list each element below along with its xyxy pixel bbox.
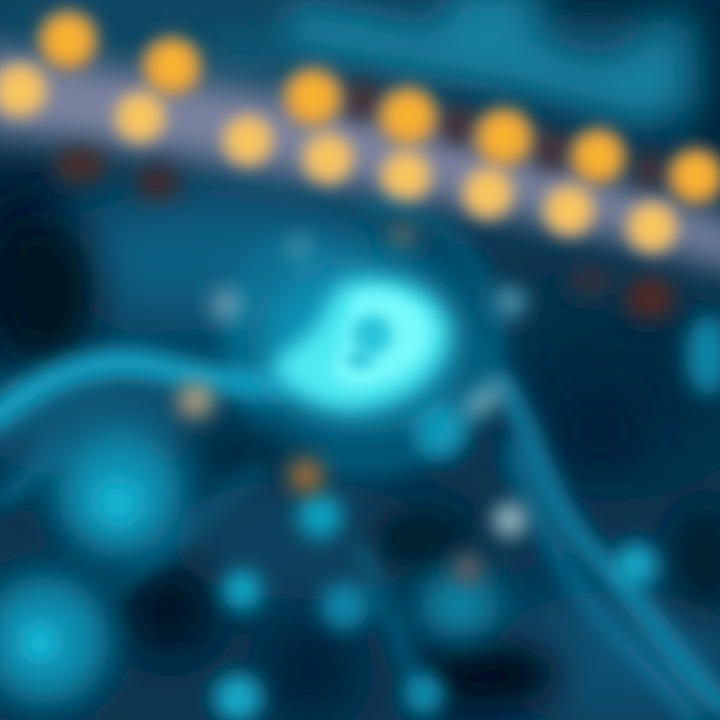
ring around central glow: [235, 205, 495, 465]
orange glowing dots: [0, 2, 720, 261]
flowing circuit lines: [0, 363, 720, 720]
lower cyan nodes: [0, 433, 500, 704]
upper teal wave, top right: [0, 0, 720, 190]
small pale and amber nodes: [178, 223, 527, 582]
central cyan glow: [245, 255, 475, 435]
diagonal grey band: [0, 45, 720, 275]
dark side and lower patches: [0, 220, 720, 716]
dark rust shadows: [54, 80, 676, 320]
